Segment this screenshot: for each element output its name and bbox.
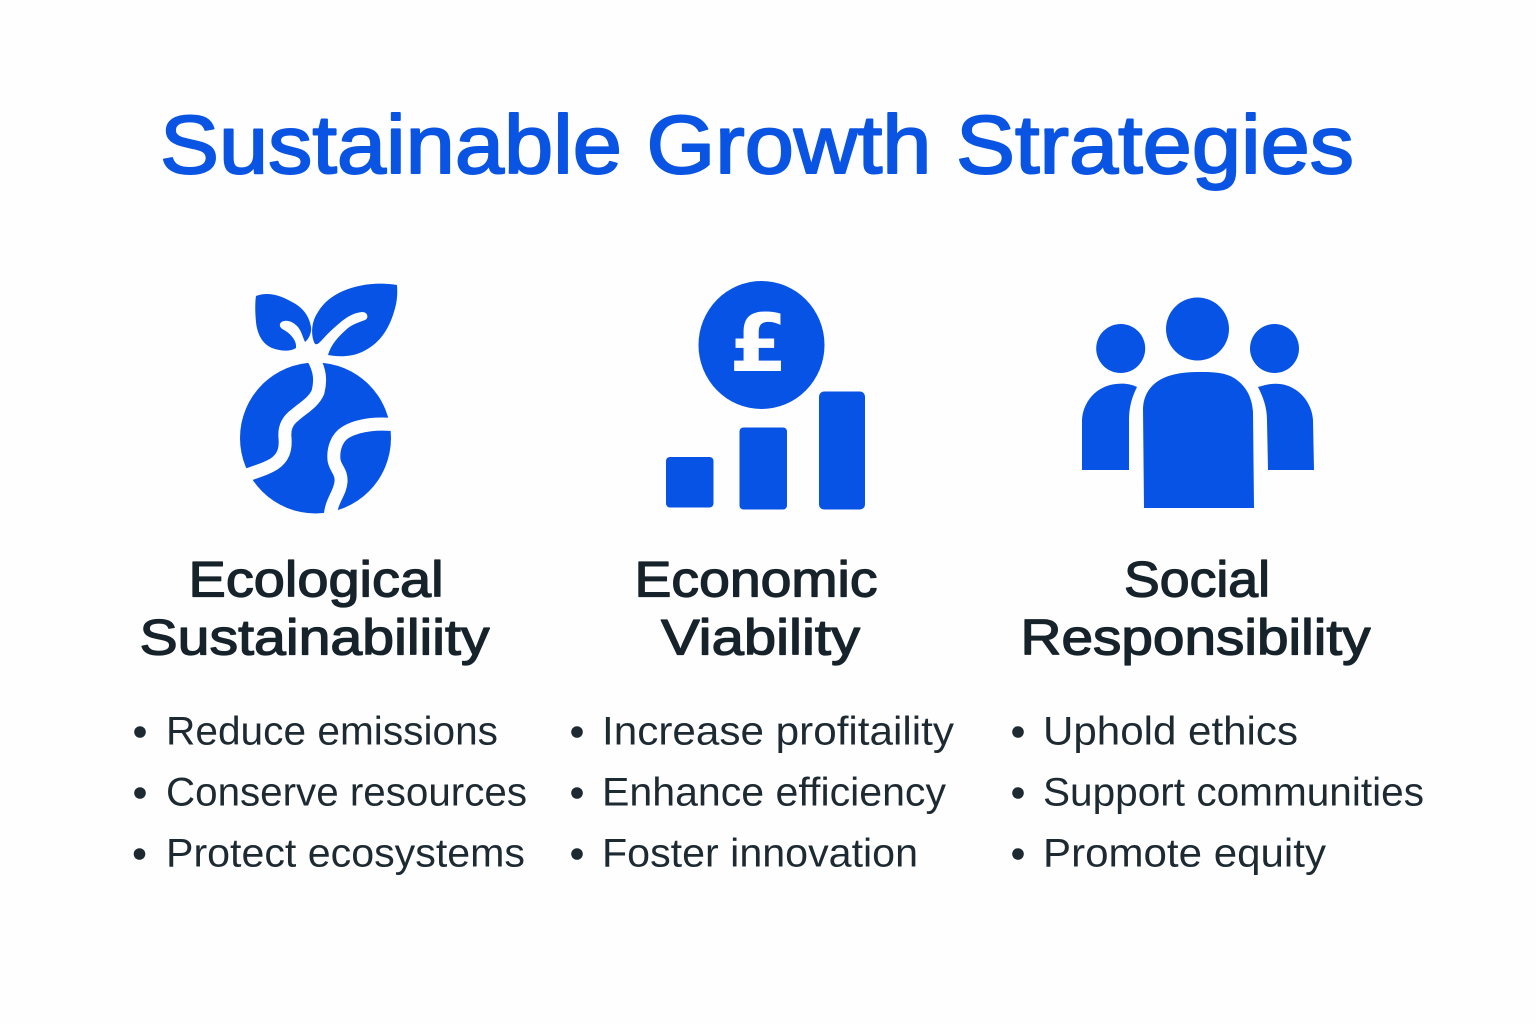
- list: ecological: Conserve resources: [166, 770, 527, 814]
- list: social: [1012, 710, 1424, 876]
- heading: economic viability: Viability: [661, 610, 860, 666]
- list: social: Promote equity: [1043, 832, 1326, 876]
- list: economic: Foster innovation: [602, 832, 918, 876]
- heading: ecological sustainability: [140, 552, 490, 666]
- icon: group of people: [1082, 298, 1314, 508]
- heading: economic viability: [634, 552, 878, 666]
- heading: ecological sustainability: Sustainabiliity: [140, 610, 490, 666]
- icon: globe with leaves: [240, 284, 398, 518]
- heading: social responsibility: Social: [1124, 552, 1270, 608]
- icon: pound coin and bars: [666, 281, 865, 510]
- list: ecological: [134, 710, 527, 876]
- heading: ecological sustainability: Ecological: [188, 552, 444, 608]
- list: ecological: Protect ecosystems: [166, 832, 525, 876]
- list: economic: Enhance efficiency: [602, 770, 946, 814]
- title: Sustainable Growth Strategies: [160, 98, 1354, 191]
- heading: economic viability: Economic: [634, 552, 878, 608]
- list: economic: [571, 710, 954, 876]
- heading: social responsibility: [1020, 552, 1370, 666]
- icon: pound coin and bars: £: [729, 297, 788, 390]
- list: social: Support communities: [1043, 770, 1424, 814]
- list: ecological: Reduce emissions: [166, 710, 498, 754]
- list: economic: Increase profitaility: [602, 710, 954, 754]
- heading: social responsibility: Responsibility: [1020, 610, 1370, 666]
- list: social: Uphold ethics: [1043, 710, 1298, 754]
